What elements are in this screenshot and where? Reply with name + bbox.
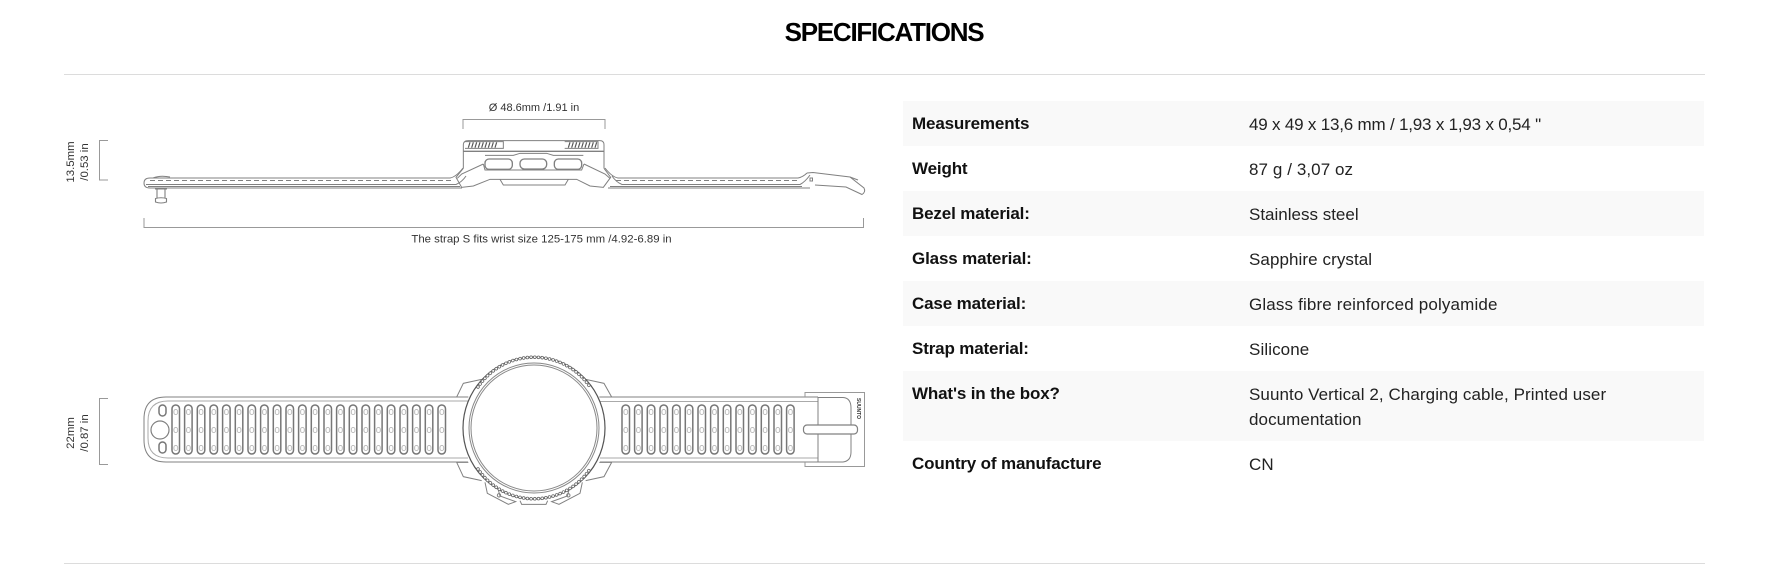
strap slots: [159, 405, 446, 454]
row: strap material: Strap material:: [912, 339, 1029, 358]
row: country of manufacture: Country of manufacture: [912, 454, 1101, 473]
panel: watch diagrams: [65, 102, 866, 505]
row: glass material: Glass material:: [912, 249, 1032, 268]
buckle: [804, 392, 864, 466]
strap pin: [155, 189, 167, 203]
row: case material: [903, 281, 1704, 326]
dimension: diameter: Ø 48.6mm /1.91 in: [489, 102, 579, 114]
dimension: strap width: 22mm: [65, 417, 77, 449]
row: what's in the box: Suunto Vertical 2, Charging cable, Printed user documentation: [1249, 385, 1606, 429]
row: bezel material: [903, 191, 1704, 236]
brand mark: SUUNTO: [855, 398, 861, 419]
row: bezel material: Bezel material:: [912, 204, 1030, 223]
row: glass material: [912, 249, 1372, 269]
left strap side: [144, 168, 466, 188]
row: bezel material: Stainless steel: [1249, 205, 1359, 224]
row: strap material: Silicone: [1249, 340, 1309, 359]
row: country of manufacture: [912, 454, 1274, 474]
row: measurements: 49 x 49 x 13,6 mm / 1,93 x 1,93 x 0,54 ": [1249, 115, 1541, 134]
row: weight: 87 g / 3,07 oz: [1249, 160, 1353, 179]
right strap front: [600, 397, 818, 462]
row: weight: Weight: [912, 159, 967, 178]
bottom divider: [64, 563, 1705, 564]
dimension: strap length: The strap S fits wrist size 125-175 mm /4.92-6.89 in: [411, 234, 672, 246]
row: what's in the box: What's in the box?: [912, 384, 1060, 403]
dimension: diameter: [463, 102, 605, 129]
row: weight: [912, 159, 1353, 179]
row: what's in the box: [903, 371, 1704, 441]
row: measurements: Measurements: [912, 114, 1029, 133]
row: case material: Glass fibre reinforced polyamide: [1249, 295, 1498, 314]
left strap front: [144, 397, 468, 462]
title: SPECIFICATIONS: [785, 17, 983, 47]
row: country of manufacture: CN: [1249, 455, 1274, 474]
dimension: height: [65, 140, 108, 183]
dimension: strap length: [144, 218, 864, 246]
row: measurements: [903, 101, 1704, 146]
strap hole: [151, 421, 169, 439]
slot holes: [172, 405, 450, 454]
side view of watch: [65, 102, 865, 246]
front view of watch: [65, 357, 864, 504]
strap slots: [622, 405, 794, 454]
watch bezel: [463, 357, 605, 499]
slot holes: [622, 405, 798, 454]
row: case material: Case material:: [912, 294, 1026, 313]
panel: specifications table: [912, 114, 1606, 474]
watch case side: [456, 141, 611, 187]
bezel beads: [478, 357, 590, 499]
dimension: strap width: /0.87 in: [79, 414, 91, 452]
watch lugs and buttons: [457, 379, 612, 504]
dimension: strap width: [65, 398, 108, 464]
row: glass material: Sapphire crystal: [1249, 250, 1372, 269]
dimension: height: 13.5mm: [65, 141, 77, 183]
row: strap material: [912, 339, 1309, 359]
right strap side with buckle: [605, 168, 865, 194]
top divider: [64, 74, 1705, 75]
dimension: height: /0.53 in: [79, 143, 91, 181]
